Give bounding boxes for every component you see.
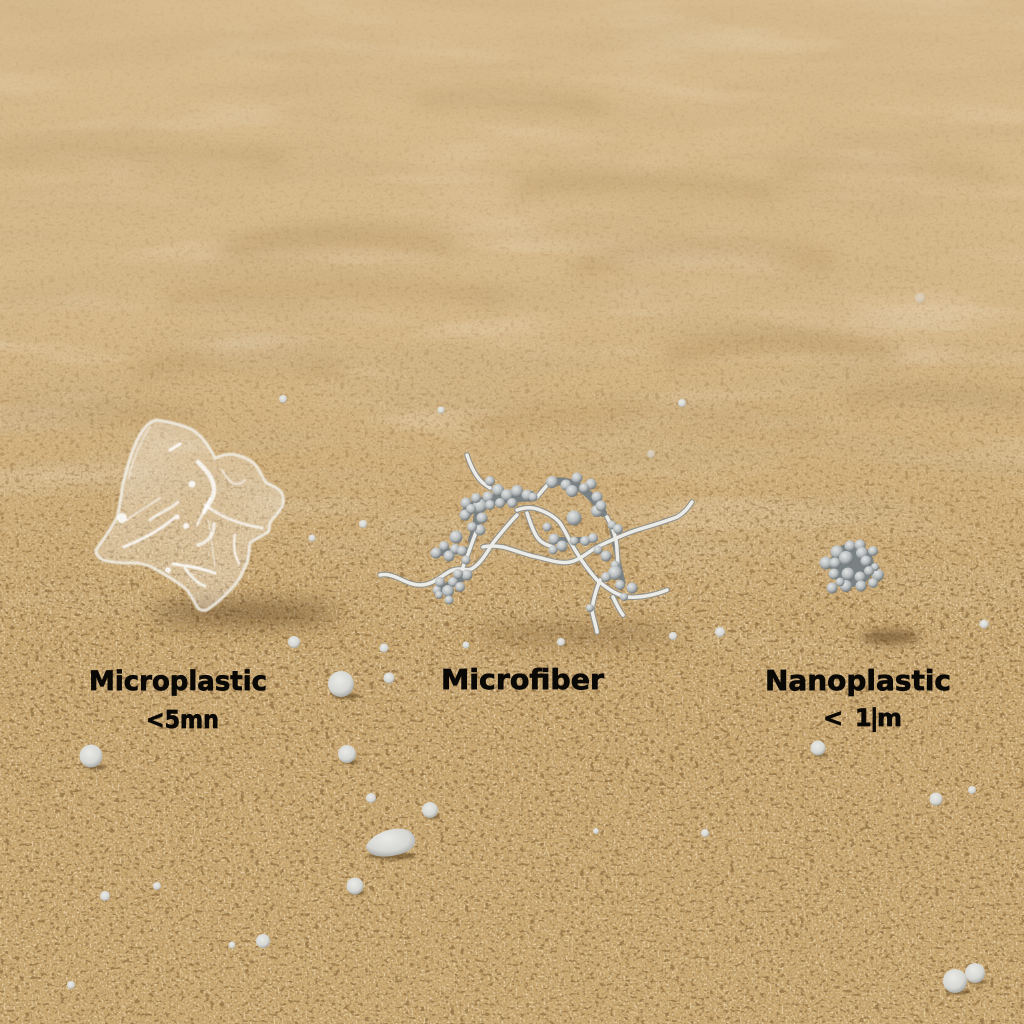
label: Nanoplastic: Nanoplastic <box>765 664 951 697</box>
bead contact shadows <box>85 693 988 994</box>
label: Microfiber: Microfiber <box>441 663 604 696</box>
label: Microplastic: Microplastic <box>89 666 267 697</box>
sand ripples <box>0 34 1024 643</box>
label: Nanoplastic: < 1|m <box>823 704 902 732</box>
microfiber cluster <box>380 455 692 632</box>
film glints <box>117 480 196 573</box>
shadows on sand <box>150 602 920 643</box>
loose plastic beads <box>67 293 988 993</box>
large pebble <box>366 829 415 857</box>
label: Microplastic: <5mn <box>146 705 219 734</box>
nanoplastic cluster <box>820 540 884 594</box>
bead clusters <box>430 472 638 612</box>
film highlights <box>124 427 262 586</box>
microplastic film fragment <box>96 420 283 610</box>
bead base shadow <box>436 481 623 590</box>
fibers <box>380 455 692 632</box>
label: Nanoplastic <box>765 664 951 732</box>
label: Microplastic <box>89 666 267 734</box>
